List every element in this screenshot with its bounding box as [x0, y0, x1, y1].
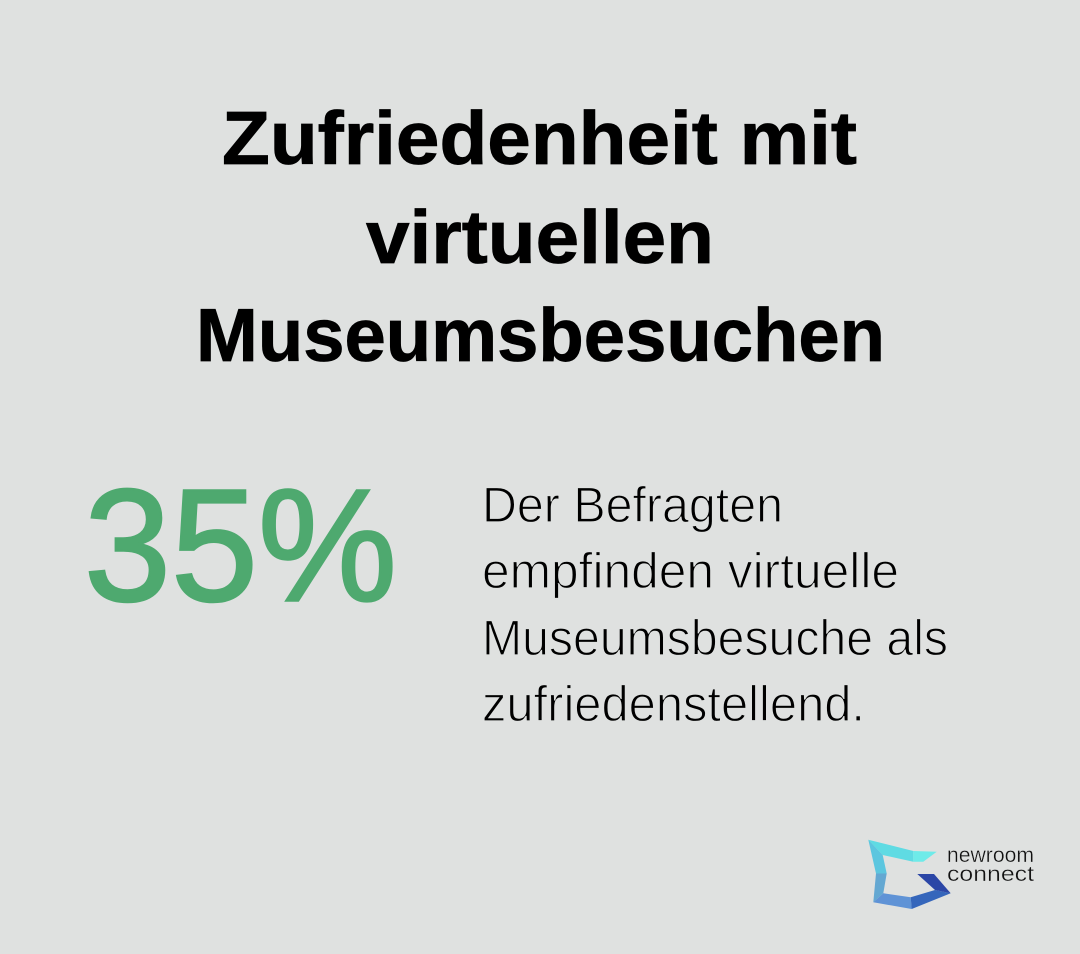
title: virtuellen — [366, 195, 714, 279]
description text: Museumsbesuche als — [482, 610, 948, 666]
logo wordmark: connect — [947, 863, 1034, 886]
description text — [482, 477, 948, 732]
description text: zufriedenstellend. — [482, 676, 865, 732]
statistic: 35%: 35% — [84, 456, 397, 634]
title — [196, 96, 885, 377]
title: Zufriedenheit mit — [222, 96, 857, 180]
title: Museumsbesuchen — [196, 293, 885, 377]
icon: logo mark — [868, 840, 951, 909]
logo wordmark: newroom — [947, 844, 1034, 867]
description text: empfinden virtuelle — [482, 543, 899, 599]
description text: Der Befragten — [482, 477, 783, 533]
logo: newroom connect — [868, 840, 1034, 909]
logo wordmark — [947, 844, 1034, 886]
